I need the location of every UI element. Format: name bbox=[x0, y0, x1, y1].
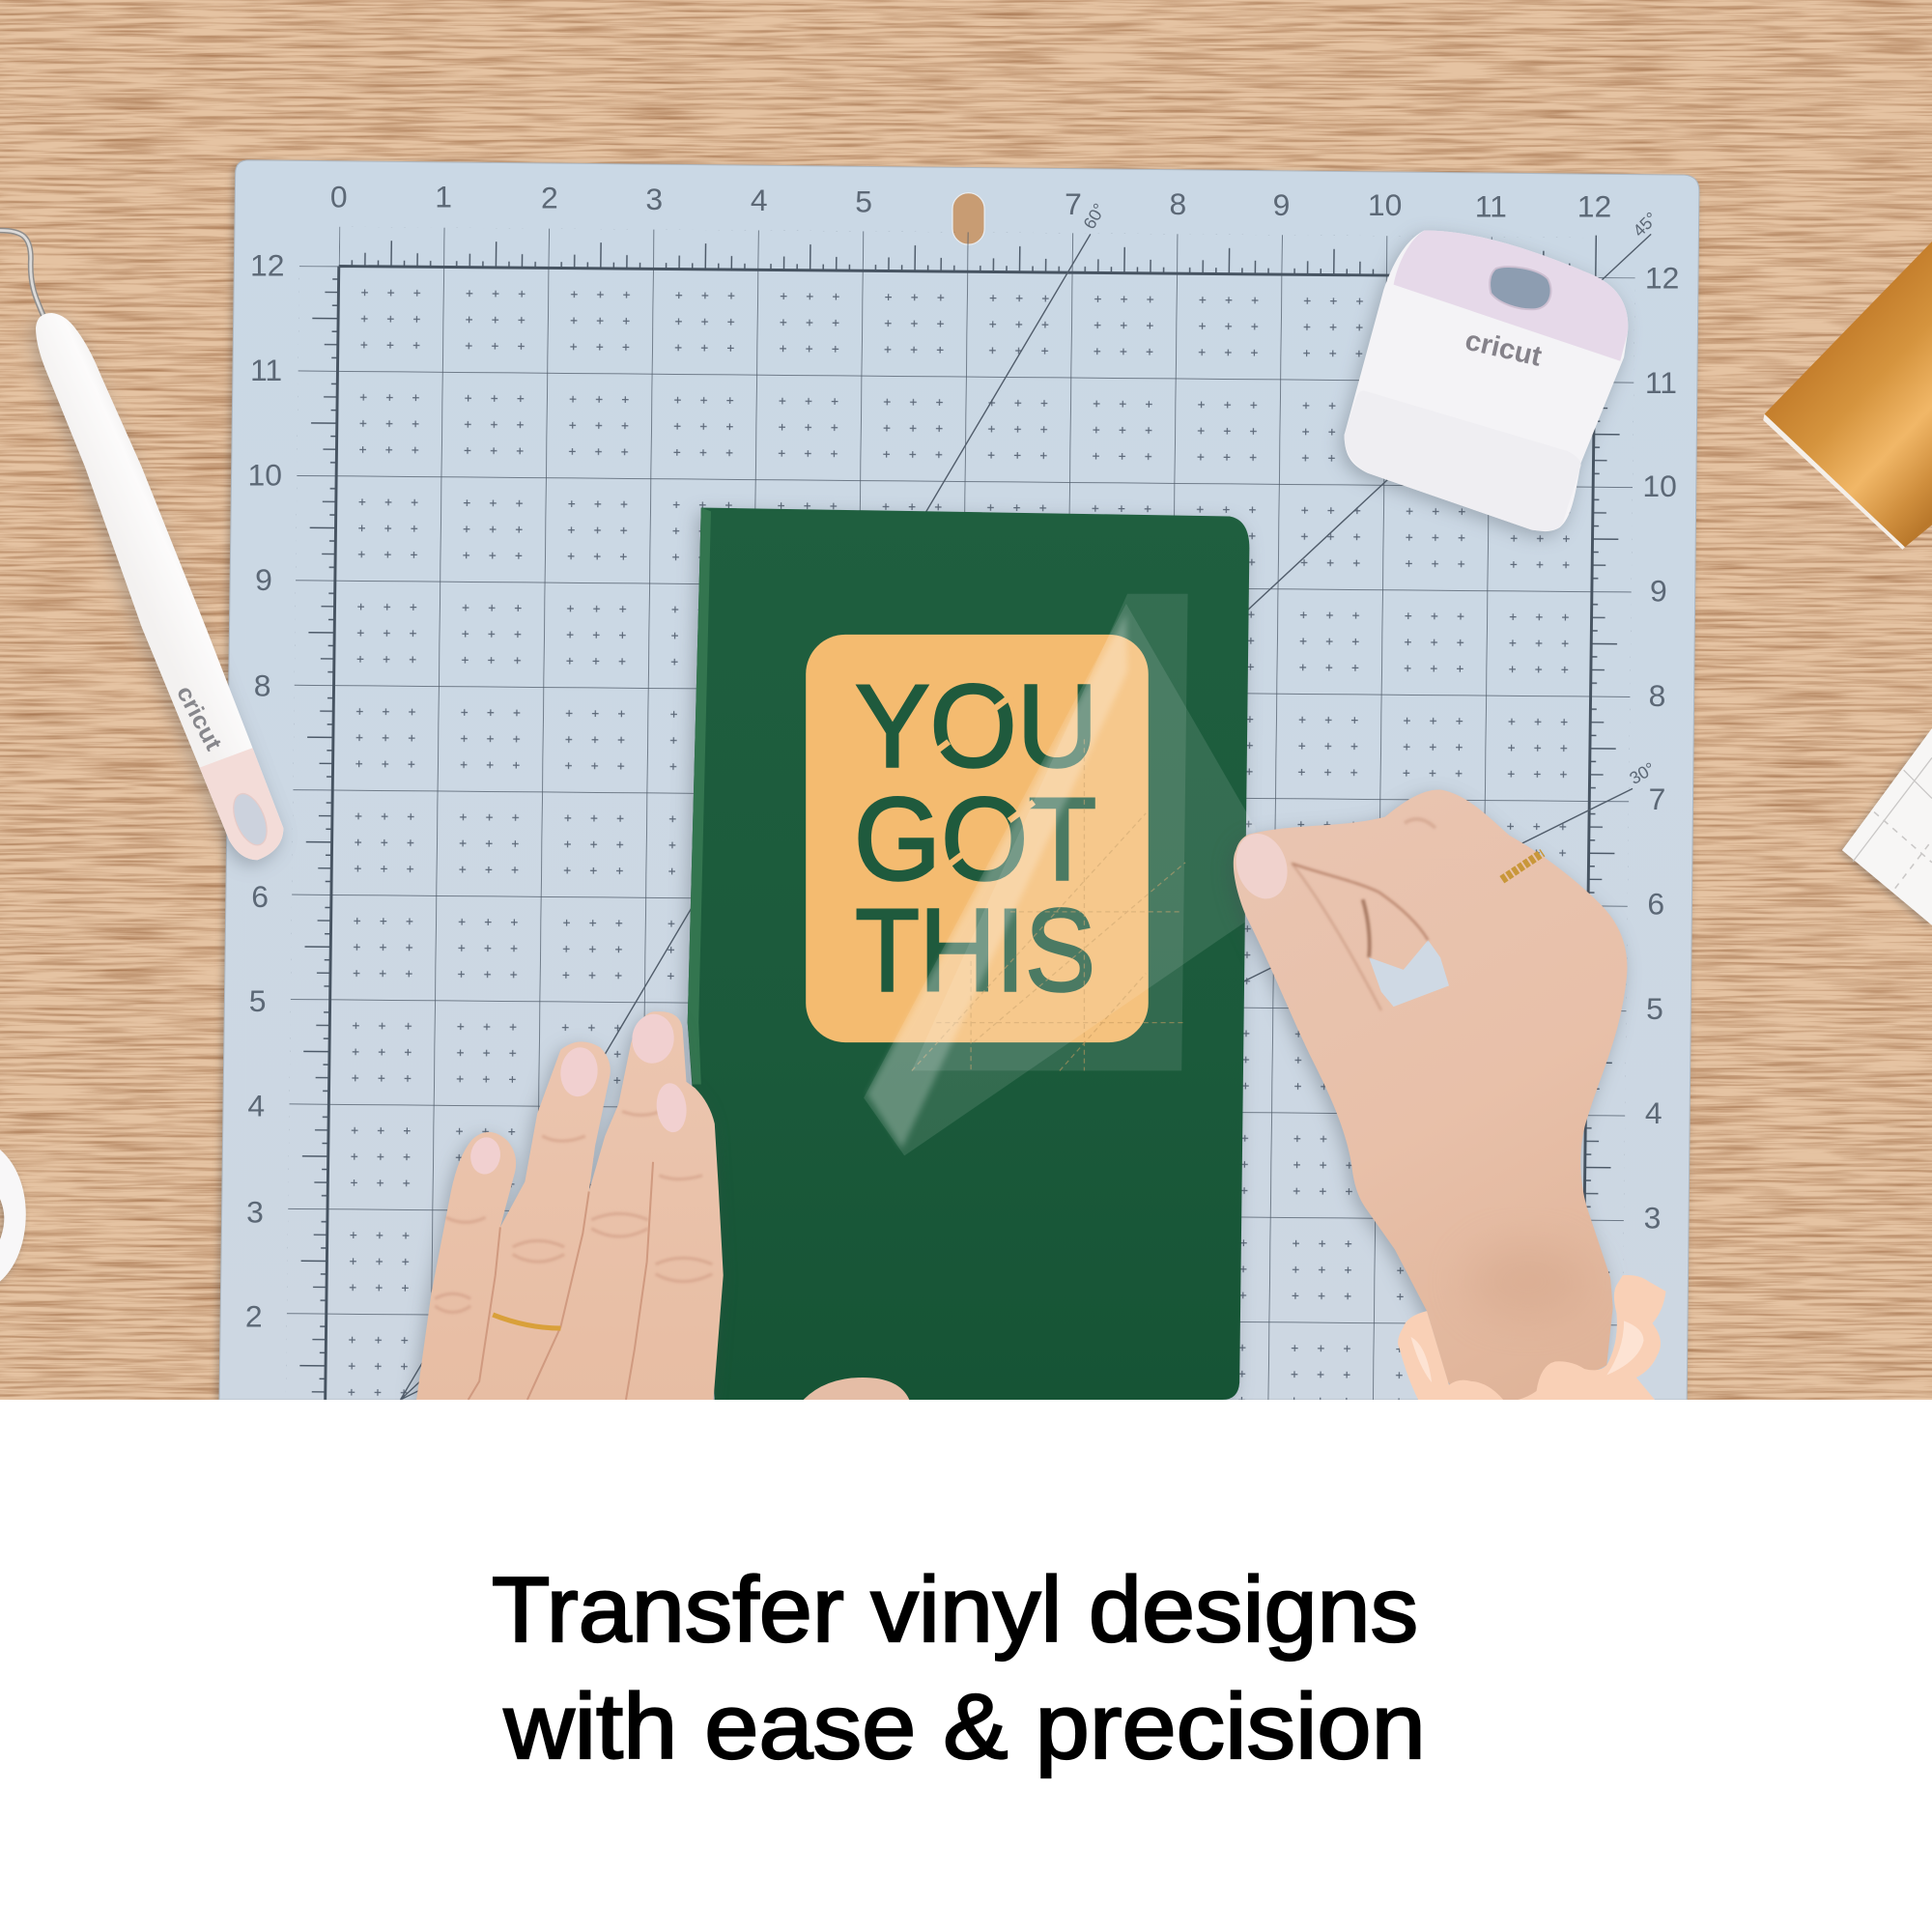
thumb nail bbox=[1228, 827, 1295, 905]
left hand nails bbox=[469, 1012, 689, 1177]
decal text: GOT bbox=[854, 774, 1096, 905]
gap between fingers bbox=[1369, 940, 1449, 1007]
icon: white transfer tape roll bbox=[1842, 728, 1932, 925]
left ruler numbers: 8 bbox=[254, 668, 271, 703]
finger shading bbox=[1292, 819, 1435, 1010]
left hand bbox=[416, 1011, 909, 1400]
left ruler numbers: 11 bbox=[250, 353, 282, 387]
top ruler numbers: 10 bbox=[1368, 187, 1402, 222]
scraper brand: cricut bbox=[1463, 325, 1545, 373]
angle labels: 60° bbox=[1080, 200, 1109, 233]
top ruler numbers: 0 bbox=[330, 179, 348, 213]
mat base bbox=[219, 160, 1699, 1400]
knuckle creases bbox=[435, 1112, 712, 1312]
right ruler numbers: 5 bbox=[1646, 991, 1663, 1026]
angle labels: 30° bbox=[1626, 758, 1659, 788]
right ruler numbers bbox=[1642, 260, 1679, 1236]
finger gaps bbox=[469, 1162, 653, 1400]
top ruler numbers: 3 bbox=[645, 182, 663, 216]
vinyl decal square bbox=[806, 635, 1149, 1042]
scrunchie left side bbox=[1398, 1311, 1503, 1400]
tape grid lines bbox=[912, 739, 1185, 1070]
top ruler numbers: 9 bbox=[1273, 187, 1290, 222]
right ruler numbers: 6 bbox=[1647, 886, 1664, 921]
left ruler numbers: 5 bbox=[249, 983, 266, 1018]
stencil cuts bbox=[924, 692, 1034, 871]
caption line 1: Transfer vinyl designs bbox=[492, 1558, 1418, 1662]
left ruler numbers: 10 bbox=[248, 458, 282, 493]
icon: gold vinyl roll bbox=[1763, 242, 1932, 550]
wood table bbox=[0, 0, 1932, 1400]
top ruler numbers: 12 bbox=[1577, 188, 1611, 223]
notebook spine bbox=[688, 508, 711, 1084]
weeder hole bbox=[227, 789, 273, 850]
cutting mat bbox=[219, 160, 1699, 1461]
scrunchie right side bbox=[1518, 1275, 1665, 1400]
wrist shadow bbox=[1466, 1244, 1589, 1319]
right ruler numbers: 10 bbox=[1642, 469, 1677, 503]
icon: scraper tool bbox=[1345, 231, 1628, 531]
right hand shape bbox=[1234, 790, 1627, 1400]
notebook bbox=[688, 508, 1256, 1400]
weeder handle bbox=[36, 313, 283, 860]
mat grid bbox=[285, 224, 1635, 1461]
scraper lower band bbox=[1345, 390, 1581, 531]
decal text bbox=[854, 660, 1097, 1016]
caption bbox=[492, 1558, 1426, 1778]
top ruler numbers: 4 bbox=[751, 183, 768, 217]
left ruler numbers: 6 bbox=[251, 879, 269, 914]
scraper lilac cap bbox=[1394, 231, 1628, 361]
tape fold highlight bbox=[867, 613, 1127, 1149]
left hand shape bbox=[416, 1011, 724, 1400]
top ruler numbers: 2 bbox=[541, 181, 558, 215]
left ruler numbers: 3 bbox=[246, 1194, 264, 1229]
weeder pink end bbox=[200, 748, 283, 860]
left ruler numbers bbox=[245, 248, 285, 1334]
icon: scissors handle bbox=[0, 1150, 26, 1282]
scraper body bbox=[1345, 231, 1628, 531]
weeder brand: cricut bbox=[171, 682, 226, 754]
right ruler numbers: 4 bbox=[1645, 1095, 1662, 1130]
angle labels: 45° bbox=[1629, 209, 1662, 241]
left ruler numbers: 4 bbox=[247, 1089, 265, 1123]
left ruler numbers: 2 bbox=[245, 1299, 263, 1334]
left hand ring bbox=[493, 1315, 560, 1328]
right ruler numbers: 8 bbox=[1649, 678, 1665, 713]
right hand bbox=[1228, 790, 1627, 1400]
thumb at notebook bottom bbox=[804, 1378, 909, 1400]
icon: weeding tool bbox=[0, 231, 283, 860]
top ruler numbers bbox=[331, 185, 1610, 216]
scraper grip hole bbox=[1490, 267, 1551, 309]
right ruler numbers: 11 bbox=[1645, 365, 1677, 400]
angle labels bbox=[1080, 200, 1662, 788]
weeder metal hook bbox=[0, 231, 44, 318]
top ruler numbers: 7 bbox=[1065, 186, 1082, 221]
decal text: YOU bbox=[855, 660, 1097, 791]
top ruler numbers: 1 bbox=[435, 179, 452, 213]
gold ring bbox=[1502, 853, 1543, 880]
caption line 2: with ease & precision bbox=[503, 1675, 1426, 1778]
top ruler numbers: 8 bbox=[1170, 186, 1186, 221]
right ruler numbers: 9 bbox=[1650, 573, 1667, 608]
mat hanging hole bbox=[952, 193, 984, 244]
scrunchie highlight bbox=[1410, 1321, 1644, 1382]
right ruler numbers: 7 bbox=[1649, 781, 1665, 816]
angle guide lines bbox=[401, 234, 1651, 1400]
left ruler numbers: 9 bbox=[255, 562, 272, 597]
right ruler numbers: 3 bbox=[1644, 1201, 1661, 1236]
peeled tape flap bbox=[864, 604, 1256, 1155]
scrunchie bbox=[1398, 1275, 1665, 1400]
top ruler numbers: 5 bbox=[855, 184, 872, 218]
transfer tape backing bbox=[912, 594, 1188, 1070]
left ruler numbers: 12 bbox=[250, 248, 285, 283]
photo bbox=[0, 0, 1932, 1461]
decal text: THIS bbox=[855, 885, 1095, 1016]
top ruler numbers: 11 bbox=[1475, 188, 1507, 223]
notebook cover bbox=[688, 508, 1249, 1400]
right ruler numbers: 12 bbox=[1645, 260, 1679, 295]
